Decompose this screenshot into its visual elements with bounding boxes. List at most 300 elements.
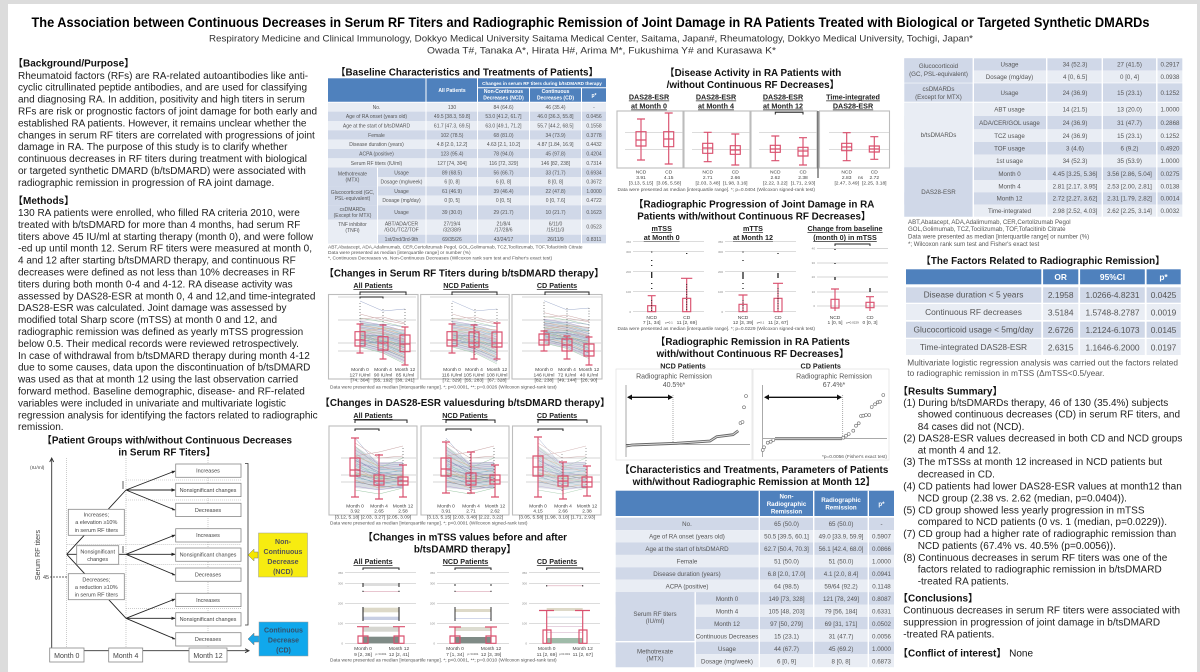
chart: DAS28 all patients <box>329 420 417 520</box>
table: factors related to remission: 0.0145 <box>1151 325 1177 335</box>
table: characteristics by remission, part 1: 6.8 [2.0, 17.0] <box>768 571 806 578</box>
table: characteristics by remission, part 1: p* <box>878 501 885 508</box>
table: baseline characteristics: 49.5 [38.3, 59.8] <box>434 114 471 120</box>
chart: change from baseline: 0 [0, 3] <box>863 320 878 326</box>
table: factors related to remission <box>906 269 1181 355</box>
callout: NCD: Decrease <box>267 559 299 566</box>
chart: mTSS month 12: p=0.1 <box>757 320 765 324</box>
month labels <box>50 648 227 662</box>
table: characteristics by remission, part 1: 62.7 [50.4, 70.3] <box>764 546 809 553</box>
chart: serum RF CD patients: 40 IU/ml <box>580 372 598 378</box>
table: factors related to remission: 1.5748-8.2787 <box>1085 308 1140 318</box>
chart: mTSS all patients: 9 [2, 36] <box>354 652 372 658</box>
callout: CD: Continuous <box>264 628 303 634</box>
table: baseline characteristics: 56 (66.7) <box>493 170 514 176</box>
table: characteristics by remission, part 2: 24 (36.9) <box>1063 133 1087 140</box>
unit and threshold: 45 <box>43 575 49 581</box>
subheadings: radiographic progression: mTTS <box>743 224 763 233</box>
chart: time-integrated DAS28: 2.83 <box>842 175 852 181</box>
panel: conflict of interest: 【Conflict of interest】 None <box>898 648 1033 660</box>
chart: CD remission scatter: *p=0.0056 (Fisher's exact test) <box>822 454 887 460</box>
y-axis label: Serum RF titers <box>33 529 42 580</box>
chart: DAS28 CD patients: 2.66 <box>558 508 568 514</box>
chart: serum RF all patients <box>328 292 418 384</box>
table: baseline characteristics: 39 (30.0) <box>442 210 462 216</box>
table: characteristics by remission, part 1: Female <box>677 558 698 565</box>
table: characteristics by remission, part 2: Time-integrated <box>988 208 1032 215</box>
table: baseline characteristics: 34 (73.9) <box>545 133 566 139</box>
table: characteristics by remission, part 2: 2.81 [2.17, 3.95] <box>1053 183 1098 190</box>
table: characteristics by remission, part 2: Month 12 <box>997 196 1023 203</box>
table: characteristics by remission, part 2: 2.62 [2.25, 3.14] <box>1107 208 1152 215</box>
table: characteristics by remission, part 1: 56.1 [42.4, 68.0] <box>819 546 864 553</box>
panel: background and purpose: and diagnosing RA. In addition, positivity and high titers in serum <box>18 95 305 106</box>
table: factors related to remission: Glucocorticoid usage < 5mg/day <box>914 325 1034 335</box>
chart: DAS28 month 0: 4.15 <box>664 175 674 181</box>
table: characteristics by remission, part 2: 0.0275 <box>1161 171 1180 178</box>
table: factors related to remission: 95%CI <box>1100 272 1125 282</box>
table: factors related to remission: 1.1646-6.2000 <box>1085 342 1140 352</box>
month 0 branches: changes <box>87 557 108 563</box>
table: characteristics by remission, part 1: (IU/ml) <box>646 618 664 625</box>
subheadings: radiographic progression: (month 0) in mTSS <box>813 233 877 242</box>
chart: DAS28 month 12: 2.38 <box>798 175 808 181</box>
chart: change from baseline: NCD <box>830 315 841 321</box>
table: characteristics by remission, part 2: 0.2868 <box>1161 120 1180 127</box>
affiliations: Respiratory Medicine and Clinical Immunology, Dokkyo Medical University Saitama Medical Center, Saitama, Japan#, Rheumatology, Dokkyo Medical University, Tochigi, Japan* <box>209 33 973 43</box>
unit and threshold <box>30 465 68 581</box>
callout: CD <box>259 622 308 656</box>
table: factors related to remission: 2.6315 <box>1048 342 1074 352</box>
table: factors related to remission: 3.5184 <box>1048 308 1074 318</box>
table: factors related to remission: 0.0197 <box>1151 342 1177 352</box>
table: characteristics by remission, part 2: 0.2917 <box>1161 62 1180 68</box>
table: baseline characteristics: 43/24/17 <box>494 237 513 243</box>
panel: background and purpose: or targeted synthetic DMARD (b/tsDMARD) were associated with <box>18 166 306 177</box>
subheadings: disease activity <box>629 92 880 110</box>
panel: results summary: (5) CD group showed less yearly progression in mTSS <box>903 505 1145 516</box>
chart: mTSS all patients: 200 <box>338 602 343 606</box>
panel: background and purpose: continuous decreases in RF titers during treatment with biological <box>18 154 307 165</box>
table: characteristics by remission, part 1: 0.0056 <box>872 634 892 640</box>
panel: background and purpose: established RA patients. However, it remains unclear whether the <box>18 118 307 129</box>
table: baseline characteristics: 127 [74, 304] <box>437 161 467 167</box>
table: characteristics by remission, part 1: Non- <box>779 494 794 500</box>
chart: mTSS month 0: 200 <box>626 270 631 274</box>
chart: mTSS NCD patients: 350 <box>430 571 435 575</box>
chart: DAS28 NCD patients: 2.71 <box>466 508 476 514</box>
table: baseline characteristics: 26/11/9 <box>547 237 564 243</box>
table: characteristics by remission, part 2: 1st usage <box>996 158 1023 165</box>
table: baseline characteristics: PSL-equivalent) <box>335 196 371 202</box>
chart: DAS28 CD patients: 4.15 <box>533 508 543 514</box>
table: baseline characteristics: 84 (64.6) <box>493 105 514 111</box>
table: baseline characteristics: 4.63 [2.1, 10.2] <box>487 142 521 148</box>
panel: methods: regression analysis for identifying the factors related to radiographic <box>18 410 318 421</box>
heading: mTSS changes: b/tsDAMRD therapy】 <box>414 544 516 556</box>
heading: radiographic progression: 【Radiographic Progression of Joint Damage in RA <box>634 199 874 211</box>
chart: NCD remission scatter: Radiographic Remission <box>636 374 712 380</box>
table: baseline characteristics: 22 (47.8) <box>545 189 566 195</box>
table: baseline characteristics: 39 (46.4) <box>493 189 514 195</box>
chart: change from baseline <box>812 244 888 326</box>
chart: CD remission scatter: Radiographic Remission <box>796 374 872 380</box>
chart: mTSS month 12: 200 <box>718 270 723 274</box>
panel: results summary: compared to NCD patients (0 vs. 1 (median, p=0.0229)). <box>918 517 1167 528</box>
table: characteristics by remission, part 1: - <box>880 521 883 528</box>
table: baseline characteristics <box>328 78 606 243</box>
table: characteristics by remission, part 2: DAS28-ESR <box>921 189 956 196</box>
table: baseline characteristics: Female <box>368 133 385 139</box>
chart: serum RF CD patients: [82, 238] <box>534 378 554 384</box>
chart: DAS28 NCD patients: [3.13, 5.15] [2.03, 3.48] [2.22, 3.22] <box>427 514 504 520</box>
chart: serum RF NCD patients: [72, 329] <box>442 378 462 384</box>
table: baseline characteristics: 10 (21.7) <box>545 210 566 216</box>
table: characteristics by remission, part 1: Radiographic <box>821 497 861 504</box>
chart: CD remission scatter <box>753 369 889 460</box>
chart: DAS28 all patients: Month 12 <box>393 503 413 509</box>
chart: NCD remission scatter <box>616 369 752 460</box>
subheadings: disease activity: DAS28-ESR <box>696 92 737 102</box>
month 0 branches: Nonsignificant <box>80 550 115 556</box>
table: characteristics by remission, part 1: 97 [50, 279] <box>770 621 803 628</box>
chart: DAS28 month 12: [1.71, 2.93] <box>791 180 816 186</box>
table: characteristics by remission, part 1: 65 (50.0) <box>829 521 853 528</box>
chart: change from baseline: 0 <box>813 304 815 308</box>
chart: DAS28 NCD patients: 3.91 <box>441 508 451 514</box>
chart: mTSS NCD patients: 300 <box>430 582 435 586</box>
table: characteristics by remission, part 2: 4.45 [3.25, 5.36] <box>1053 171 1098 178</box>
chart: mTSS month 12: 300 <box>718 250 723 254</box>
table: baseline characteristics: ACPA (positive) <box>359 152 394 158</box>
month 0 branches: in serum RF titers <box>75 528 118 534</box>
table: baseline characteristics: 61.7 [47.3, 69.5] <box>434 124 471 130</box>
subheadings: serum RF panels <box>353 281 577 290</box>
chart: mTSS NCD patients: 200 <box>430 602 435 606</box>
table: baseline characteristics: 0.8311 <box>587 237 602 243</box>
table: characteristics by remission, part 2: 24 (36.9) <box>1063 120 1087 127</box>
table: baseline characteristics: 27/19/4 <box>444 222 461 228</box>
table: baseline characteristics: /32/38/9 <box>443 228 461 234</box>
callout: NCD: Non- <box>275 539 292 546</box>
month 0 branches <box>68 509 124 600</box>
chart: mTSS month 12: 100 <box>718 290 723 294</box>
table: characteristics by remission, part 2 <box>904 58 1182 217</box>
chart: mTSS CD patients: 350 <box>522 571 527 575</box>
table: baseline characteristics: 55.7 [44.2, 68.5] <box>537 124 574 130</box>
chart: mTSS NCD patients: p<0.001 <box>468 652 479 656</box>
table: baseline characteristics: Usage <box>394 170 409 176</box>
subheadings: disease activity: at Month 0 <box>631 102 667 110</box>
table: characteristics by remission, part 2: 0.1252 <box>1161 90 1180 97</box>
table: baseline characteristics: 0.6934 <box>586 170 602 176</box>
table: characteristics by remission, part 1: Age of RA onset (years old) <box>649 534 725 540</box>
table: baseline characteristics: Serum RF titers (IU/ml) <box>351 161 403 167</box>
chart: mTSS month 0: CD <box>683 315 691 321</box>
chart: DAS28 month 4: [2.03, 3.48] <box>695 180 721 186</box>
panel: results summary: (3) The mTSSs at month 12 increased in NCD patients but <box>903 457 1162 468</box>
panel: methods: -ed up until month 12. Serum RF titers were measured at month 0, <box>18 244 312 255</box>
unit and threshold: (IU/ml) <box>30 465 45 471</box>
table: baseline characteristics: 53.0 [41.2, 61.7] <box>485 114 522 120</box>
chart: serum RF all patients: Month 0 <box>351 367 369 373</box>
chart: DAS28 all patients: 2.58 <box>398 508 408 514</box>
table: baseline characteristics: Changes in serum RF titers during b/tsDMARD therapy <box>482 81 602 86</box>
month 12 outcome boxes: Decreases <box>195 508 221 514</box>
chart: DAS28 month 4 <box>684 111 750 186</box>
chart: change from baseline: CD <box>866 315 874 321</box>
chart: mTSS all patients: 300 <box>338 582 343 586</box>
subheadings: mTSS panels: All Patients <box>353 557 393 566</box>
table: baseline characteristics: All Patients <box>438 88 466 94</box>
subheadings: serum RF panels: All Patients <box>353 281 393 290</box>
table: characteristics by remission, part 1: 64 (98.5) <box>774 584 799 590</box>
table: factors related to remission: 2.1958 <box>1048 290 1074 300</box>
table: baseline characteristics: 33 (71.7) <box>545 170 566 176</box>
table: baseline characteristics: Glucocorticoid (GC, <box>331 190 374 196</box>
chart: DAS28 month 4: 2.66 <box>731 175 740 181</box>
table: factors related to remission: Disease duration < 5 years <box>924 290 1023 300</box>
panel: results summary: decreased in CD. <box>918 469 995 480</box>
table: characteristics by remission, part 1: 31 (47.7) <box>829 634 853 640</box>
table: baseline characteristics: 123 (95.4) <box>441 152 464 158</box>
subheadings: DAS28-ESR panels: All Patients <box>353 411 393 420</box>
chart: mTSS NCD patients: 12 [3, 39] <box>481 652 502 658</box>
table: baseline characteristics: csDMARDs <box>340 207 366 213</box>
table: baseline characteristics: 29 (21.7) <box>493 210 514 216</box>
table: baseline characteristics: Dosage (mg/day) <box>382 198 421 204</box>
panel: background and purpose: changes in serum RF titers are correlated with progressions of joint <box>18 130 315 141</box>
month 12 outcome boxes: Increases <box>196 598 220 604</box>
table: characteristics by remission, part 1: Dosage (mg/week) <box>701 658 753 666</box>
table: baseline characteristics: 0.4432 <box>586 142 602 148</box>
table: characteristics by remission, part 1: Methotrexate <box>637 648 674 656</box>
table: baseline characteristics: /17/28/6 <box>494 228 513 234</box>
chart: DAS28 month 12: CD <box>799 169 807 175</box>
chart: mTSS CD patients: Month 0 <box>538 646 556 652</box>
table: baseline characteristics: (TNFi) <box>345 228 360 234</box>
heading: characteristics by remission <box>620 464 889 488</box>
chart: DAS28 month 0: NCD <box>636 169 647 175</box>
divider: time-integrated <box>817 111 819 178</box>
chart: serum RF all patients: [38, 241] <box>395 378 415 384</box>
table: baseline characteristics: TNF inhibitor <box>338 222 367 228</box>
table: baseline characteristics: 45 (97.8) <box>545 152 566 158</box>
chart: DAS28 month 12 <box>751 111 817 186</box>
subheadings: mTSS panels <box>353 557 577 566</box>
chart: mTSS CD patients: 0 <box>525 642 527 646</box>
table: characteristics by remission, part 2: Glucocorticoid <box>919 63 959 70</box>
table: characteristics by remission, part 1: 0.6331 <box>872 608 892 615</box>
chart: mTSS month 12: 12 [3, 39] <box>733 320 754 326</box>
chart: mTSS NCD patients: Month 0 <box>446 646 464 652</box>
chart: DAS28 all patients: [3.12, 5.18] [2.03, 3.27] [2.05, 3.09] <box>335 514 412 520</box>
footnote: characteristics table: ABT,Abatacept, ADA,Adalimumab, CER,Certolizumab Pegol <box>908 219 1071 226</box>
subheadings: serum RF panels: CD Patients <box>537 281 577 290</box>
table: characteristics by remission, part 1: Age at the start of b/tsDMARD <box>645 546 729 553</box>
chart: serum RF all patients: 85 IU/ml <box>396 372 414 378</box>
panel: background and purpose: radiographic remission in progression of RA joint damage. <box>18 178 274 189</box>
chart: serum RF all patients: [74, 304] <box>350 378 370 384</box>
subheadings: radiographic remission: NCD Patients <box>660 361 706 370</box>
table: characteristics by remission, part 2: 2.31 [1.79, 2.82] <box>1107 196 1152 203</box>
table: baseline characteristics: 63.0 [49.1, 71.2] <box>485 124 522 130</box>
table: characteristics by remission, part 2: Dosage (mg/day) <box>986 74 1033 81</box>
table: baseline characteristics: 78 (94.0) <box>493 152 514 158</box>
table: characteristics by remission, part 1: Month 12 <box>714 621 740 628</box>
chart: mTSS all patients: Month 0 <box>354 646 372 652</box>
table footnote: baseline: *, Continuous Decreases vs. Non-Continuous Decreases (Wilcoxon rank sum test and Fisher's exact test) <box>328 255 552 261</box>
chart: mTSS month 12: NCD <box>738 315 749 321</box>
table: baseline characteristics: 6/11/0 <box>549 222 562 228</box>
table: characteristics by remission, part 2: 1.0000 <box>1161 158 1180 165</box>
chart: DAS28 month 12: 2.62 <box>771 175 780 181</box>
table: characteristics by remission, part 1: 0.5907 <box>872 534 892 540</box>
table: characteristics by remission, part 1: 4.1 [2.0, 8.4] <box>824 571 858 578</box>
chart: DAS28 month 0 <box>617 111 683 186</box>
chart: DAS28 month 0: CD <box>665 169 673 175</box>
table: baseline characteristics: /GOL/TCZ/TOF <box>384 228 419 234</box>
heading: disease activity: 【Disease Activity in RA Patients with <box>665 67 841 79</box>
chart: mTSS month 12: 350 <box>718 240 723 244</box>
heading: characteristics by remission: with/without Radiographic Remission at Month 12】 <box>632 476 875 488</box>
subheadings: disease activity: at Month 4 <box>698 102 734 110</box>
month 0 branches: a elevation ≥10% <box>75 520 117 526</box>
table: baseline characteristics: 8 [0, 8] <box>548 180 564 186</box>
chart: DAS28 CD patients <box>512 420 601 520</box>
callout: CD: (CD) <box>276 648 291 654</box>
table: characteristics by remission, part 1: 45 (69.2) <box>829 646 853 653</box>
chart: DAS28 all patients: Month 0 <box>346 503 364 509</box>
flow diagram: patient groups <box>30 458 308 662</box>
table: characteristics by remission, part 2: 2.53 [2.00, 2.81] <box>1107 183 1152 190</box>
panel: results summary: (4) CD patients had lower DAS28-ESR values at month12 than <box>903 481 1182 492</box>
heading: factors: 【The Factors Related to Radiographic Remission】 <box>921 255 1165 267</box>
table: baseline characteristics: /15/11/3 <box>547 228 565 234</box>
table: baseline characteristics: 130 <box>448 105 456 111</box>
subheadings: disease activity: at Month 12 <box>763 102 803 110</box>
table: characteristics by remission, part 2: 0.0014 <box>1161 196 1180 203</box>
footnote: DAS28: Data were presented as median [interquartile range]. *; p<0.0001 (Wilcoxon signed-rank test) <box>330 520 528 526</box>
chart: serum RF CD patients: Month 12 <box>579 367 599 373</box>
chart: serum RF NCD patients: Month 0 <box>443 367 461 373</box>
table: baseline characteristics: Disease duration (years) <box>349 142 404 148</box>
table footnote: baseline: Data were presented as median [interquartile range] or number (%) <box>328 250 471 256</box>
month 12 outcome boxes: Increases <box>196 533 220 539</box>
table: characteristics by remission, part 1: 121 [78, 249] <box>823 596 859 603</box>
table: factors related to remission: p* <box>1159 272 1168 282</box>
table: characteristics by remission, part 1: 0.8087 <box>872 596 892 603</box>
heading: radiographic remission: with/without Continuous RF Decreases】 <box>655 348 849 360</box>
chart: serum RF CD patients: 146 IU/ml <box>534 372 554 378</box>
subheadings: disease activity: DAS28-ESR <box>763 92 804 102</box>
branching arrows <box>67 471 176 639</box>
chart: mTSS month 0: 300 <box>626 250 631 254</box>
month labels: Month 4 <box>113 653 138 660</box>
table: characteristics by remission, part 1: 65 (50.0) <box>774 521 799 528</box>
chart: DAS28 CD patients: [3.05, 5.58] [1.98, 3.18] [1.71, 2.93] <box>519 514 596 520</box>
table: characteristics by remission, part 1: 44 (67.7) <box>774 646 799 653</box>
chart: DAS28 CD patients: Month 4 <box>554 503 572 509</box>
footnote: characteristics table: *; Wilcoxon rank sum test and Fisher's exact test <box>908 241 1040 248</box>
month 0 branches: a reduction ≥10% <box>75 585 118 591</box>
chart: mTSS month 0 <box>626 240 704 326</box>
chart: mTSS month 12: CD <box>774 315 782 321</box>
chart: serum RF NCD patients: Month 4 <box>465 367 483 373</box>
panel: results summary: NCD group (2.38 vs. 2.62 (median, p=0.0404)). <box>918 494 1127 505</box>
chart: mTSS CD patients: 11 [2, 67] <box>573 652 593 658</box>
chart: DAS28 CD patients: 2.38 <box>582 508 592 514</box>
panel: methods: radiographic remission was defined as yearly mTSS progression <box>18 327 303 338</box>
heading: patient groups: 【Patient Groups with/without Continuous Decreases <box>42 434 292 446</box>
chart: DAS28 NCD patients: 2.62 <box>490 508 500 514</box>
table: factors related to remission: 1.0266-4.8231 <box>1085 290 1140 300</box>
chart: serum RF NCD patients: [55, 283] <box>464 378 484 384</box>
table: characteristics by remission, part 2: 0.0938 <box>1161 74 1180 81</box>
panel: conclusions: 【Conclusions】 <box>898 592 978 604</box>
chart: mTSS all patients: Month 12 <box>389 646 409 652</box>
table: baseline characteristics: 6 [0, 8] <box>444 180 460 186</box>
table: characteristics by remission, part 1: 0.0502 <box>872 621 892 628</box>
panel: results summary <box>898 385 1182 588</box>
panel: methods: variables were included in univariate and multivariate logistic <box>18 398 286 409</box>
chart: serum RF NCD patients <box>421 292 509 384</box>
panel: conclusions: suppression in progression of joint damage in b/tsDMARD <box>903 617 1160 628</box>
chart: mTSS CD patients <box>522 568 600 658</box>
chart: serum RF all patients: 127 IU/ml <box>350 372 370 378</box>
callout: NCD: (NCD) <box>273 569 293 576</box>
table: baseline characteristics: 0.4204 <box>586 152 602 158</box>
panel: methods: titers above 45 IU/ml at starting therapy (month 0), and were follow <box>18 232 314 243</box>
footnote: radiographic progression: Data were presented as median [interquartile range]. *; p=0.0229 (Wilcoxon signed-rank test) <box>618 326 815 332</box>
table: characteristics by remission, part 2: 15 (23.1) <box>1117 90 1142 97</box>
table: characteristics by remission, part 2: 34 (52.3) <box>1063 158 1087 165</box>
chart: mTSS CD patients: 200 <box>522 602 527 606</box>
chart: mTSS NCD patients: 100 <box>430 622 435 626</box>
month 12 outcome boxes: Increases <box>196 468 220 474</box>
chart: time-integrated DAS28 <box>820 111 890 186</box>
table: characteristics by remission, part 2: (GC, PSL-equivalent) <box>909 71 968 78</box>
heading: patient groups: in Serum RF Titers】 <box>118 446 216 458</box>
table: characteristics by remission, part 1: 0.0941 <box>872 571 892 578</box>
table: characteristics by remission, part 1: Remission <box>771 508 802 516</box>
chart: serum RF CD patients: Month 0 <box>535 367 553 373</box>
table: factors related to remission: 0.0425 <box>1151 290 1177 300</box>
month 12 outcome boxes: Nonsignificant changes <box>180 552 237 558</box>
table: characteristics by remission, part 1: 105 [48, 203] <box>768 608 805 615</box>
subheadings: DAS28-ESR panels: NCD Patients <box>442 411 488 420</box>
table: baseline characteristics: (MTX) <box>346 178 360 184</box>
subheadings: radiographic remission <box>660 361 841 370</box>
table: characteristics by remission, part 2: Usage <box>1001 62 1019 68</box>
table: characteristics by remission, part 2: 0.0032 <box>1161 208 1180 215</box>
chart: time-integrated DAS28: CD <box>871 169 878 175</box>
chart: mTSS month 0: 350 <box>626 240 631 244</box>
footnote: characteristics table <box>908 219 1089 248</box>
chart: serum RF NCD patients: 116 IU/ml <box>442 372 462 378</box>
table: baseline characteristics: 0.4722 <box>586 198 602 204</box>
panel: background and purpose: RFs are risk or prognostic factors of joint damage for both early and <box>18 106 317 118</box>
panel: methods: In case of withdrawal from b/tsDMARD therapy during month 4-12 <box>18 351 310 362</box>
subheadings: radiographic remission: CD Patients <box>801 361 841 370</box>
table: factors related to remission: OR <box>1054 272 1067 282</box>
table: characteristics by remission, part 2: 2.98 [2.52, 4.03] <box>1053 208 1098 215</box>
chart: mTSS month 12: 11 [2, 67] <box>768 320 789 326</box>
table: characteristics by remission, part 2: TCZ usage <box>994 133 1025 140</box>
panel: results summary: NCD patients (67.4% vs. 40.5% (p=0.0056)). <box>918 541 1116 552</box>
chart: mTSS all patients: 350 <box>338 571 343 575</box>
subheadings: radiographic progression <box>644 224 883 242</box>
